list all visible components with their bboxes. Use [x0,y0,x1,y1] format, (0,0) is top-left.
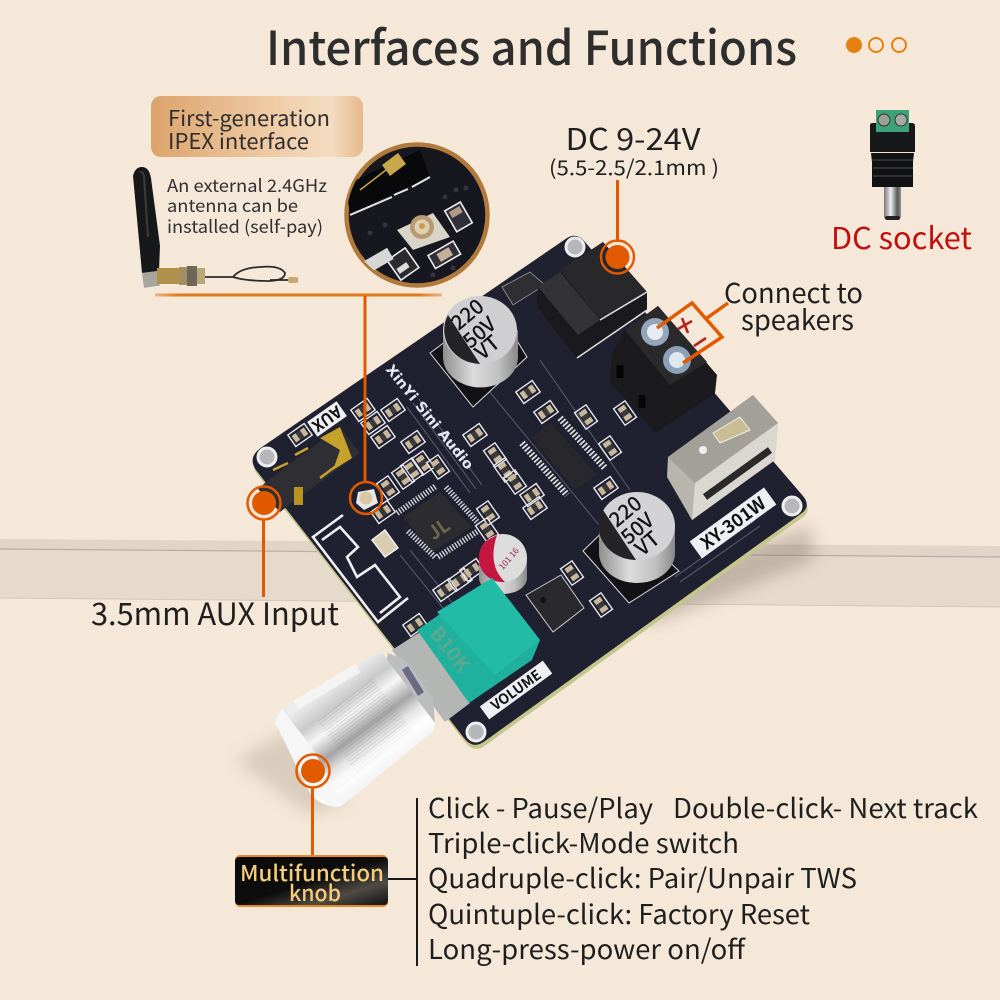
page indicator dots [846,37,906,53]
silkscreen labels: AUX [308,400,348,439]
label: DC voltage: DC 9-24V [566,115,701,159]
circuit board: JL [422,511,455,546]
icon: antenna with cable [133,167,298,288]
knob body [275,653,435,807]
silkscreen labels: XY-301W [695,490,771,555]
nut [385,653,435,723]
diode [502,272,545,305]
pot housing [392,632,470,722]
silkscreen labels: VOLUME [486,665,545,716]
silkscreen labels [306,362,778,721]
label: connect to speakers: speakers [741,298,854,338]
mounting holes [258,238,801,741]
board base [254,240,808,749]
label: multifunction knob: Multifunction [240,856,384,888]
label: DC voltage: (5.5-2.5/2.1mm ) [549,151,719,181]
label: connect to speakers: Connect to [724,271,863,311]
traces [400,360,760,635]
label: First-generation IPEX interface [151,96,363,157]
function list: Double-click- Next track [673,787,978,826]
callout: AUX input [248,486,280,597]
capacitor 220 bottom: 220 [601,487,647,533]
function list: Long-press-power on/off [428,928,747,967]
function list: Triple-click-Mode switch [428,822,739,861]
shadow under board [640,525,815,625]
label: connect to speakers [724,271,863,338]
function list: Click - Pause/Play [428,787,653,826]
mosfet [526,575,584,632]
callout: DC power [601,180,634,274]
function list: Quadruple-click: Pair/Unpair TWS [428,857,857,896]
capacitor 220 top: 50V [455,308,502,354]
function list: Quintuple-click: Factory Reset [428,893,810,932]
small red capacitor: 101 16 [496,545,522,572]
leader line: IPEX [155,294,442,482]
silkscreen labels: XinYi Sini Audio [382,362,476,473]
icon: DC socket [870,110,915,220]
SMD components [288,381,636,636]
label: DC socket: DC socket [831,214,972,258]
DC jack [537,242,647,358]
volume potentiometer and knob: B10K [424,619,478,678]
main chip [403,492,472,552]
AUX jack [258,427,360,512]
label: multifunction knob [235,855,388,908]
inset: IPEX close-up [345,144,488,286]
label: First-generation IPEX interface: IPEX interface [168,125,309,156]
capacitor 220 top [430,290,527,407]
label: 3.5mm AUX input: 3.5mm AUX Input [91,589,339,634]
antenna description: antenna can be [167,193,298,218]
speaker polarity marks [678,318,706,346]
label: First-generation IPEX interface: First-generation [168,102,330,133]
antenna description [167,173,327,239]
label: multifunction knob: knob [289,876,341,908]
antenna description: An external 2.4GHz [167,173,327,198]
callout: knob marker [296,754,330,856]
capacitor 220 bottom [583,487,679,603]
crystal [372,530,398,557]
callout: speaker bracket [657,303,728,363]
capacitor 220 bottom: 50V [613,504,660,550]
label: DC voltage [549,115,719,181]
capacitor 220 bottom: VT [626,523,665,562]
volume potentiometer and knob [275,578,540,807]
function list [428,787,978,967]
callout: IPEX socket marker [350,482,382,514]
small red capacitor [479,534,527,594]
capacitor 220 top: 220 [443,290,489,336]
bluetooth antenna trace [313,515,408,622]
title: Interfaces and Functions [266,10,797,79]
amplifier chip [532,422,597,490]
green pot [417,578,540,703]
USB socket [667,395,778,520]
capacitor 220 top: VT [466,327,505,366]
screw terminal [610,306,717,433]
antenna description: installed (self-pay) [167,214,323,239]
circuit board [253,236,808,749]
connector bracket [388,798,417,966]
